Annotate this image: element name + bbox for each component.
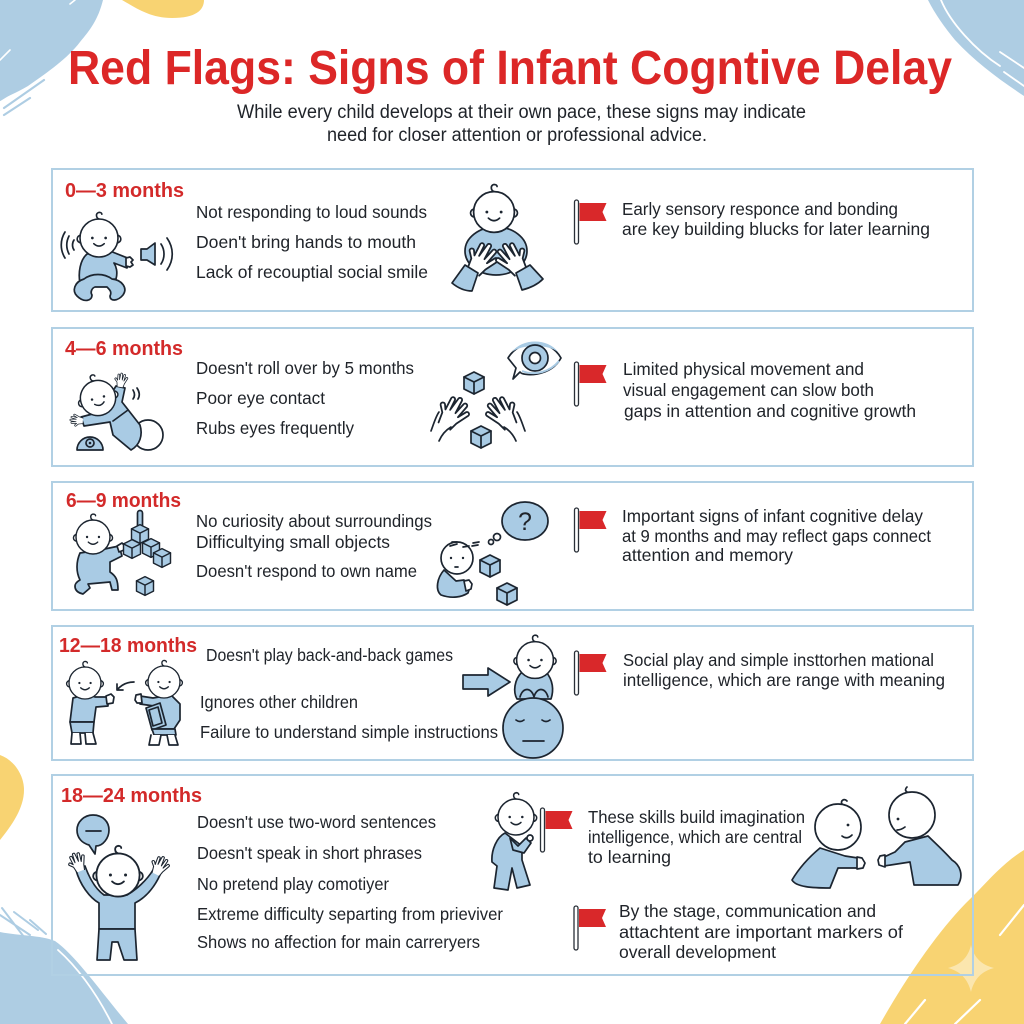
note: imagination: These skills build imagination — [588, 807, 805, 827]
text: 0-3 months signs: Doen't bring hands to mouth — [196, 232, 416, 252]
note: 0-3 months — [622, 199, 930, 239]
heading: 4-6 months: 4—6 months — [65, 338, 183, 360]
note: 6-9 months: attention and memory — [622, 545, 793, 565]
note: imagination: to learning — [588, 847, 671, 867]
panel: 0-3 months — [52, 169, 973, 311]
text: 6-9 months signs: Doesn't respond to own name — [196, 561, 417, 581]
text: 12-18 months signs — [200, 645, 498, 742]
text: 4-6 months signs: Poor eye contact — [196, 388, 325, 408]
text: 0-3 months signs: Lack of recouptial social smile — [196, 262, 428, 282]
icon: baby on ball — [503, 635, 563, 758]
text: 0-3 months signs: Not responding to loud sounds — [196, 202, 427, 222]
note: imagination — [588, 807, 805, 867]
icon: red flag — [574, 362, 606, 406]
heading: 12-18 months: 12—18 months — [59, 635, 197, 657]
icon: baby with blocks — [73, 510, 170, 595]
subtitle — [237, 102, 806, 146]
text: 18-24 months signs: Doesn't speak in short phrases — [197, 843, 422, 863]
text: 12-18 months signs: Failure to understand simple instructions — [200, 722, 498, 742]
icon: eye speech bubble — [508, 342, 561, 379]
icon: baby with raised arms — [65, 846, 172, 960]
note: 4-6 months: visual engagement can slow both — [623, 380, 874, 400]
text: 12-18 months signs: Doesn't play back-and-back games — [206, 645, 453, 665]
title: Red Flags: Signs of Infant Cogntive Delay — [68, 42, 952, 95]
text: 18-24 months signs: Doesn't use two-word sentences — [197, 812, 436, 832]
text: 18-24 months signs: Extreme difficulty separting from prieviver — [197, 904, 503, 924]
note: communication: attachtent are important markers of — [619, 922, 903, 942]
heading: 6-9 months: 6—9 months — [66, 490, 181, 512]
text: 18-24 months signs: No pretend play comotiyer — [197, 874, 389, 894]
icon: speaker — [141, 238, 172, 270]
decoration: sparkle — [948, 945, 994, 992]
decoration: bottom-left blue brush — [0, 908, 128, 1024]
text: 12-18 months signs: Ignores other children — [200, 692, 358, 712]
icon: baby holding book — [135, 660, 182, 745]
icon: baby with caregiver hands — [452, 184, 543, 291]
note: 12-18 months: intelligence, which are range with meaning — [623, 670, 945, 690]
text: 4-6 months signs: Doesn't roll over by 5 months — [196, 358, 414, 378]
subtitle: While every child develops at their own pace, these signs may indicate — [237, 102, 806, 123]
note: 4-6 months: gaps in attention and cognitive growth — [624, 401, 916, 421]
icon: speech bubble — [77, 815, 109, 854]
text: 6-9 months signs — [196, 511, 432, 581]
icon: standing baby with flag — [492, 793, 572, 890]
icon: red flag — [574, 508, 606, 552]
icon: blocks and hands — [431, 372, 525, 448]
text: 0-3 months signs — [196, 202, 428, 282]
decoration: top yellow blob — [122, 0, 204, 18]
text: 18-24 months signs: Shows no affection for main carreryers — [197, 932, 480, 952]
note: 6-9 months: Important signs of infant cognitive delay — [622, 506, 923, 526]
panel: 18-24 months — [52, 775, 973, 975]
icon: red flag — [574, 906, 606, 950]
text: 6-9 months signs: No curiosity about surroundings — [196, 511, 432, 531]
decoration: top-right blue brush — [928, 0, 1024, 96]
note: 0-3 months: Early sensory responce and bonding — [622, 199, 898, 219]
icon: baby rolling — [69, 370, 163, 450]
text: 4-6 months signs — [196, 358, 414, 438]
icon: arrow — [463, 668, 510, 696]
icon: red flag — [574, 200, 606, 244]
note: 6-9 months — [622, 506, 931, 565]
note: imagination: intelligence, which are central — [588, 827, 802, 847]
subtitle: need for closer attention or professional advice. — [327, 125, 707, 146]
text: 6-9 months signs: Difficultying small objects — [196, 532, 390, 552]
note: 0-3 months: are key building blucks for later learning — [622, 219, 930, 239]
decoration: left yellow blob — [0, 755, 24, 840]
icon: confused baby with thought bubble: ? — [518, 508, 532, 536]
note: 6-9 months: at 9 months and may reflect gaps connect — [622, 526, 931, 546]
panel: 4-6 months — [52, 328, 973, 466]
note: 12-18 months: Social play and simple insttorhen mational — [623, 650, 934, 670]
note: communication: By the stage, communication and — [619, 901, 876, 921]
heading: 0-3 months: 0—3 months — [65, 180, 184, 202]
heading: 18-24 months: 18—24 months — [61, 785, 202, 807]
icon: small exchange arrow — [117, 682, 134, 690]
text: 18-24 months signs — [197, 812, 503, 952]
note: communication: overall development — [619, 942, 776, 962]
note: 4-6 months — [623, 359, 916, 421]
note: communication — [619, 901, 903, 962]
note: 4-6 months: Limited physical movement and — [623, 359, 864, 379]
icon: two babies playing — [792, 787, 961, 888]
icon: baby hearing sound — [61, 212, 133, 300]
panel: 12-18 months — [52, 626, 973, 760]
icon: red flag — [574, 651, 606, 695]
note: 12-18 months — [623, 650, 945, 690]
icon: baby reaching — [67, 661, 114, 744]
decoration: bottom-right yellow brush — [880, 850, 1024, 1024]
icon: confused baby with thought bubble — [437, 502, 548, 605]
decoration: top-left blue brush — [0, 0, 103, 115]
panel: 6-9 months — [52, 482, 973, 610]
text: 4-6 months signs: Rubs eyes frequently — [196, 418, 354, 438]
